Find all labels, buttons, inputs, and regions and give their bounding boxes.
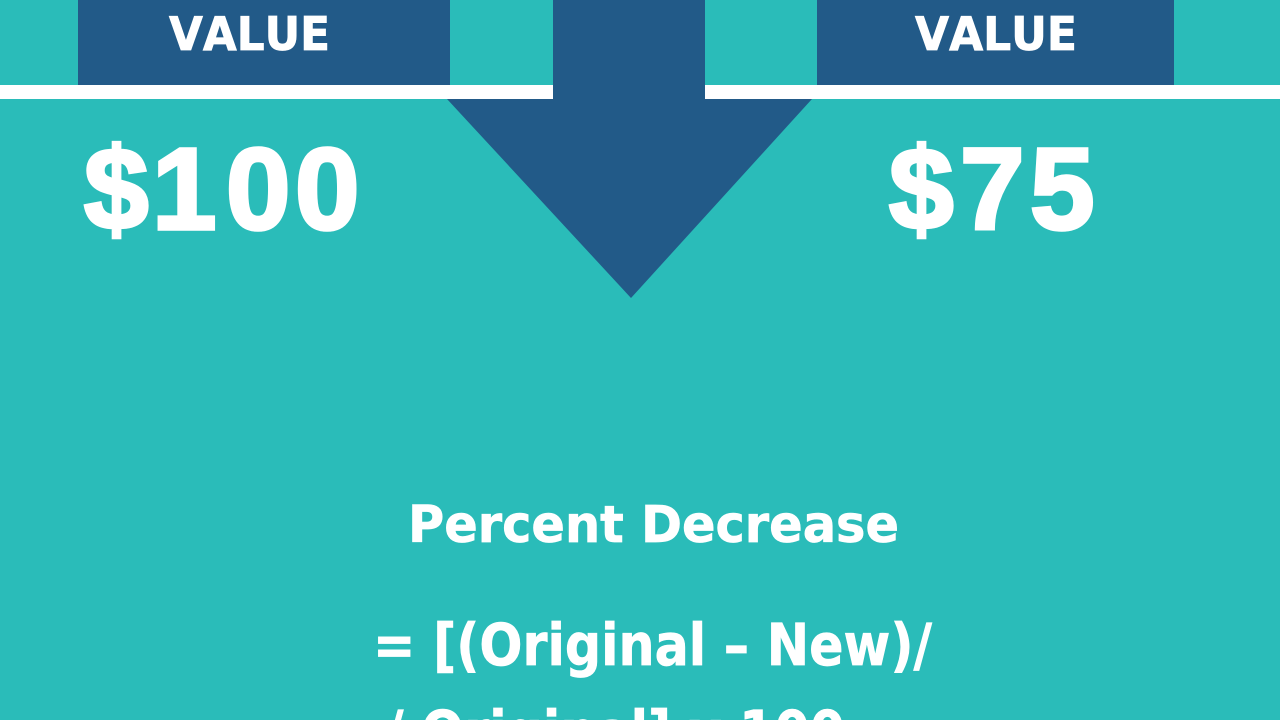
original value header box	[78, 0, 450, 85]
arrow: downward decrease arrow	[447, 0, 812, 298]
panel: original value column	[0, 0, 553, 254]
original value header box: VALUE	[169, 7, 330, 61]
new value header box: VALUE	[915, 7, 1077, 61]
formula heading: Percent Decrease	[408, 496, 899, 555]
formula line one: = [(Original – New)/	[373, 611, 933, 679]
formula text block	[373, 496, 933, 720]
left white divider	[0, 85, 553, 99]
panel: new value column	[705, 0, 1280, 254]
right white divider	[705, 85, 1280, 99]
new value header box	[817, 0, 1174, 85]
new value amount: $75	[889, 124, 1095, 254]
original value amount: $100	[84, 124, 360, 254]
